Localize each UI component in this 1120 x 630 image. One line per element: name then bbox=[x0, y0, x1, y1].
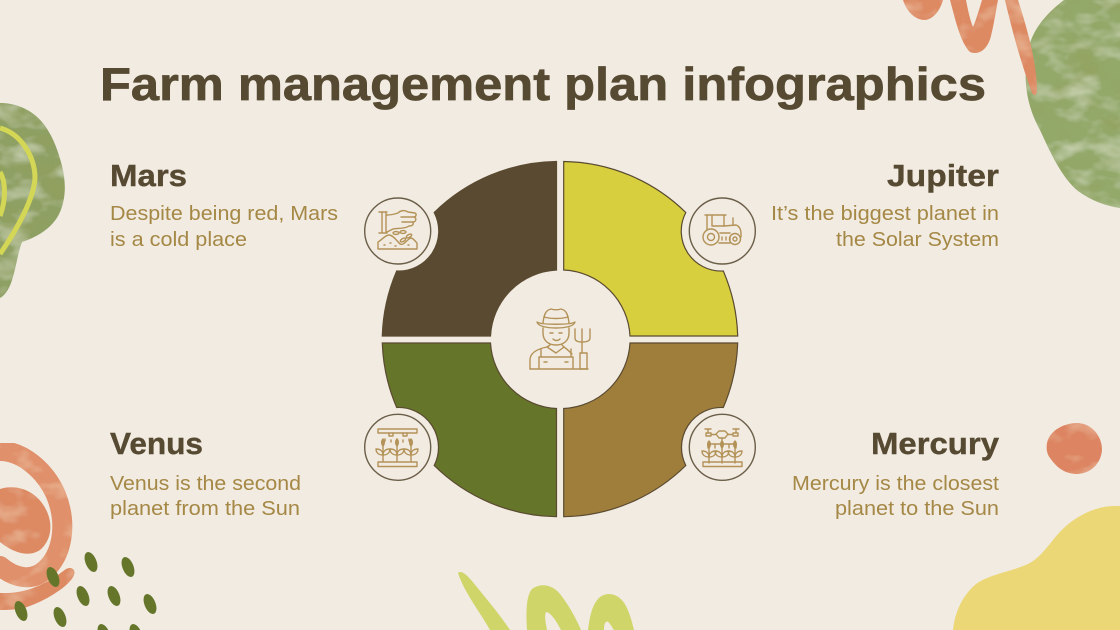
panel: Mercury text bbox=[792, 426, 1000, 520]
text block: Mars description: is a cold place bbox=[110, 229, 247, 251]
heading: Venus: Venus bbox=[110, 426, 203, 461]
text block: Venus description bbox=[110, 473, 301, 520]
heading: Jupiter: Jupiter bbox=[887, 158, 999, 193]
segment: Mars, dark brown bbox=[382, 162, 556, 336]
text block: Venus description: planet from the Sun bbox=[110, 498, 300, 520]
decoration: yellow line swirl left bbox=[0, 128, 35, 254]
icon: drone over plants in circle bbox=[689, 414, 755, 480]
title: Farm management plan infographics bbox=[100, 58, 986, 110]
decoration: green blob left bbox=[0, 103, 65, 298]
text block: Jupiter description bbox=[771, 203, 999, 251]
heading: Mercury: Mercury bbox=[871, 426, 1000, 461]
text block: Jupiter description: It’s the biggest planet in bbox=[771, 203, 999, 225]
panel: Jupiter text bbox=[771, 158, 999, 251]
text block: Mars description: Despite being red, Mars bbox=[110, 203, 338, 225]
decoration: yellow blob bottom right bbox=[953, 506, 1120, 630]
panel: Venus text bbox=[110, 426, 301, 520]
text block: Venus description: Venus is the second bbox=[110, 473, 301, 495]
icon: farmer with pitchfork bbox=[530, 309, 590, 369]
decoration: orange scribble top bbox=[903, 0, 1037, 95]
icon: hand sowing seeds in circle bbox=[365, 198, 431, 264]
decoration: orange swirl bottom left bbox=[0, 451, 75, 610]
chart: four-part donut bbox=[382, 162, 738, 517]
text block: Mercury description: Mercury is the closest bbox=[792, 473, 999, 495]
decoration: green dashes bbox=[12, 550, 159, 630]
icon: sprinklers over plants in circle bbox=[365, 414, 431, 480]
text block: Jupiter description: the Solar System bbox=[836, 229, 999, 251]
panel: Mars text bbox=[110, 158, 338, 251]
segment: Mercury, ochre bbox=[564, 343, 738, 517]
decoration: orange dot right bbox=[1047, 423, 1102, 474]
text block: Mercury description bbox=[792, 473, 999, 520]
text block: Mars description bbox=[110, 203, 338, 251]
text block: Mercury description: planet to the Sun bbox=[835, 498, 999, 520]
segment: Jupiter, yellow bbox=[564, 162, 738, 336]
decoration: lime scribble bottom bbox=[458, 572, 634, 630]
heading: Mars: Mars bbox=[110, 158, 187, 193]
segment: Venus, olive green bbox=[382, 343, 556, 517]
icon: tractor in circle bbox=[689, 198, 755, 264]
decoration: green blob top right bbox=[1026, 0, 1120, 208]
